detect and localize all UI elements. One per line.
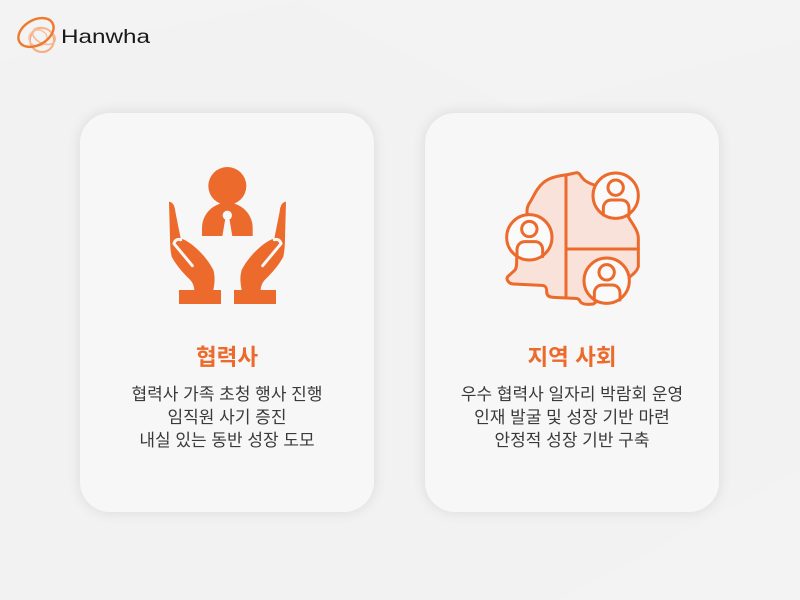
text block: 지역 사회 description bbox=[461, 385, 683, 450]
right hand bbox=[234, 202, 286, 304]
user circle: bottom bbox=[584, 258, 629, 303]
text block: 협력사 description bbox=[132, 385, 322, 450]
logo: Hanwha bbox=[17, 16, 150, 53]
panel: 협력사 bbox=[80, 113, 374, 512]
text block: 지역 사회 description: 안정적 성장 기반 구축 bbox=[495, 431, 649, 450]
text block: 지역 사회 description: 인재 발굴 및 성장 기반 마련 bbox=[474, 408, 670, 427]
text block: 협력사 description: 임직원 사기 증진 bbox=[168, 408, 286, 427]
user circle: left bbox=[507, 215, 552, 260]
text block: 협력사 description: 협력사 가족 초청 행사 진행 bbox=[132, 385, 322, 404]
left hand bbox=[169, 202, 221, 304]
user circle: top right bbox=[593, 173, 638, 218]
logo wordmark: Hanwha bbox=[61, 26, 150, 48]
logo mark bbox=[13, 12, 59, 53]
person bbox=[202, 167, 253, 236]
heading: 협력사: 협력사 bbox=[196, 345, 258, 370]
heading: 지역 사회: 지역 사회 bbox=[527, 345, 617, 370]
text block: 협력사 description: 내실 있는 동반 성장 도모 bbox=[139, 431, 315, 450]
panel: 지역 사회 bbox=[425, 113, 719, 512]
text block: 지역 사회 description: 우수 협력사 일자리 박람회 운영 bbox=[461, 385, 683, 404]
